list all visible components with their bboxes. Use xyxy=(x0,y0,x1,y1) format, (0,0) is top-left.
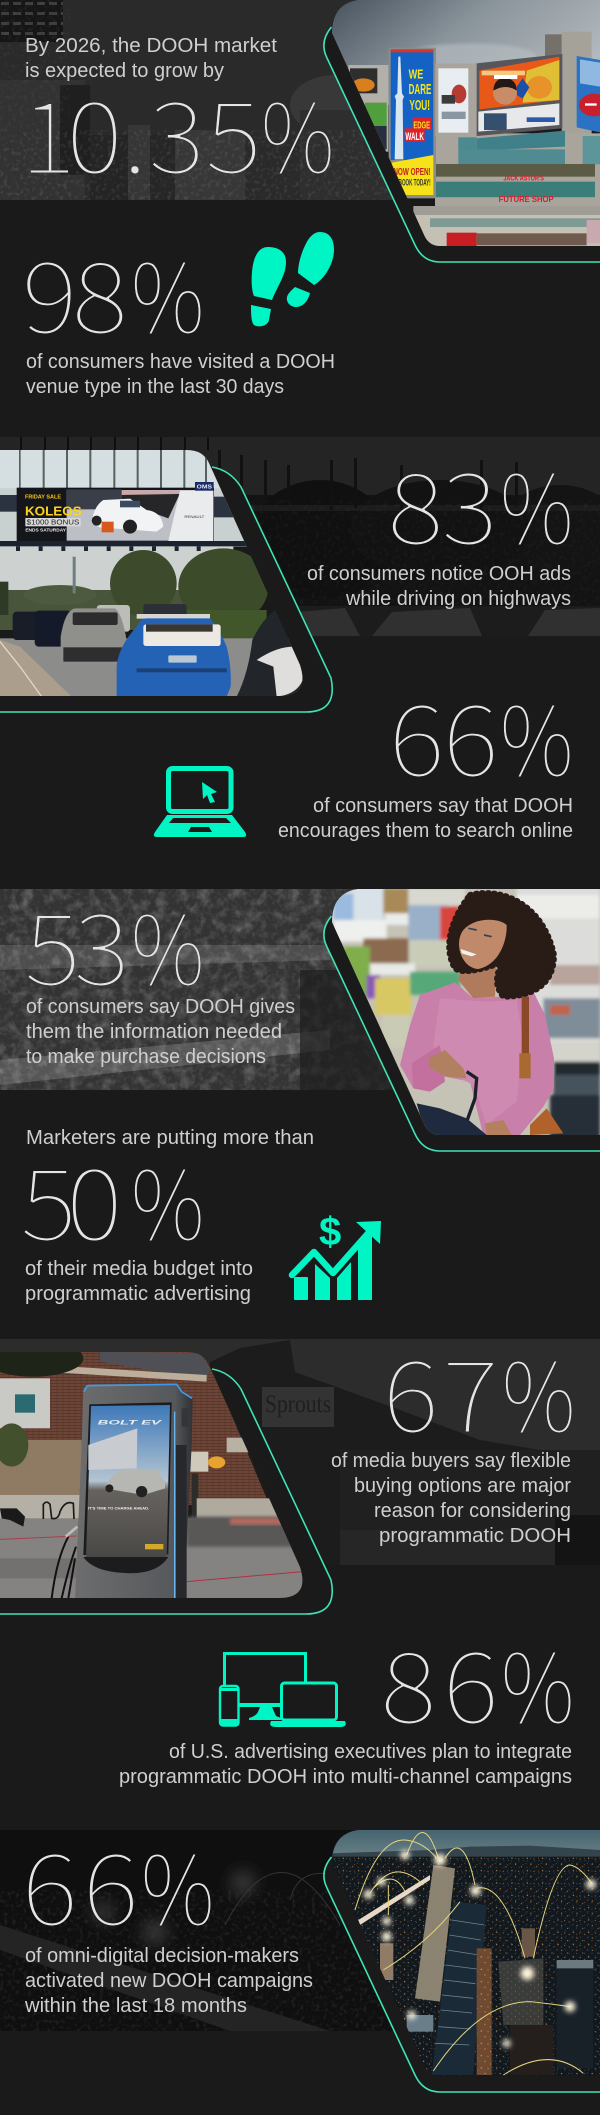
mid building xyxy=(436,133,600,198)
photo: highway billboard: FRIDAY SALE xyxy=(25,495,61,501)
photo frame outline xyxy=(0,450,332,712)
photo frame outline xyxy=(324,889,600,1151)
photo: Yonge-Dundas billboards: EDGE xyxy=(413,120,430,131)
text: omni-digital: activated new DOOH campaigns xyxy=(25,1970,313,1992)
background photo band: city at night xyxy=(0,1830,420,2031)
text: purchase decisions: to make purchase decisions xyxy=(26,1046,266,1068)
panel: online search xyxy=(154,666,574,842)
statistic: 83% xyxy=(388,434,574,573)
tree line xyxy=(0,590,188,630)
text: flexible buying xyxy=(331,1450,571,1547)
photo frame outline xyxy=(0,1352,332,1614)
text: venue visits xyxy=(26,351,335,398)
text: online search: encourages them to search online xyxy=(278,820,573,842)
background photo band: highway xyxy=(0,437,600,637)
text: multi-channel: of U.S. advertising executives plan to integrate xyxy=(169,1741,572,1763)
statistic: 86%: 86 xyxy=(380,1613,499,1751)
storefront signs: JACK ASTOR'S xyxy=(503,174,544,183)
background photo band: city square xyxy=(0,0,400,200)
network glow nodes xyxy=(364,1850,596,2047)
statistic: 10.35%: 10.35 xyxy=(20,63,261,201)
photo: Yonge-Dundas billboards xyxy=(330,0,600,250)
icon: laptop with cursor xyxy=(154,768,246,837)
photo: connected night skyline xyxy=(330,1825,600,2080)
background photo band: store shelves xyxy=(0,889,410,1090)
network arcs xyxy=(355,1832,592,2075)
statistic: 98%: % xyxy=(130,223,205,362)
photo: Yonge-Dundas billboards: FUTURE SHOP xyxy=(499,194,554,204)
text: multi-channel: programmatic DOOH into multi-channel campaigns xyxy=(119,1766,572,1788)
statistic: 66%: 66 xyxy=(388,666,498,804)
icon: growth chart with dollar sign: $ xyxy=(319,1210,341,1254)
photo: Yonge-Dundas billboards: WE xyxy=(409,66,423,81)
text: media budget: programmatic advertising xyxy=(25,1283,251,1305)
photo frame outline xyxy=(324,1830,600,2092)
kiosk body xyxy=(75,1384,193,1598)
text: omni-digital xyxy=(24,1945,313,2017)
sky lower xyxy=(0,546,234,590)
panel: market growth xyxy=(0,0,600,262)
text: flexible buying: of media buyers say flexible xyxy=(331,1450,571,1472)
panel: purchase decisions xyxy=(0,875,600,1151)
panel: multi-channel xyxy=(119,1613,575,1788)
right billboard xyxy=(577,56,600,132)
photo: Yonge-Dundas billboards: BOOK TODAY! xyxy=(399,178,431,188)
photo: Yonge-Dundas billboards: NOW OPEN! xyxy=(393,167,431,178)
statistic: 98% xyxy=(22,223,205,362)
text: media budget xyxy=(25,1258,253,1305)
photo: charging kiosk xyxy=(0,1340,310,1598)
intro text: By 2026, the DOOH market xyxy=(25,35,277,57)
statistic: 10.35%: % xyxy=(260,63,335,202)
statistic: 66%: 66 xyxy=(22,1815,139,1953)
strap, hand, basket, bag xyxy=(522,997,529,1053)
icon: growth chart with dollar sign xyxy=(292,1210,381,1300)
background photo band: storefront: Sprouts xyxy=(265,1391,331,1418)
statistic: 98%: 98 xyxy=(22,223,128,361)
statistic: 83%: % xyxy=(500,434,574,573)
photo: highway billboard xyxy=(0,440,310,700)
photo: highway billboard: ENDS SATURDAY xyxy=(25,528,66,533)
icon: footprints xyxy=(251,232,334,326)
text: venue visits: of consumers have visited a DOOH xyxy=(26,351,335,373)
statistic: 67%: 67 xyxy=(382,1322,499,1460)
photo: highway billboard: $1000 BONUS xyxy=(27,520,80,527)
road xyxy=(0,638,310,700)
photo: highway billboard: RENAULT xyxy=(184,515,205,519)
background photo band: storefront xyxy=(0,1339,600,1565)
text: flexible buying: reason for considering xyxy=(374,1500,571,1522)
text: online search xyxy=(278,795,573,842)
statistic: 53% xyxy=(24,875,205,1014)
photo: shopper in store xyxy=(330,885,600,1138)
text: purchase decisions: them the information needed xyxy=(26,1021,282,1043)
panel: media budget xyxy=(20,1127,381,1305)
photo: highway billboard: KOLEOS xyxy=(25,503,82,518)
photo: highway billboard: OMS xyxy=(197,485,212,491)
text: venue visits: venue type in the last 30 days xyxy=(26,376,284,398)
text: media budget: of their media budget into xyxy=(25,1258,253,1280)
text: flexible buying: programmatic DOOH xyxy=(379,1525,571,1547)
photo: Yonge-Dundas billboards: DARE xyxy=(409,82,431,98)
shelves xyxy=(330,885,465,1048)
statistic: 50%: % xyxy=(130,1130,205,1269)
text: flexible buying: buying options are major xyxy=(354,1475,571,1497)
billboard xyxy=(17,488,214,542)
panel: venue visits xyxy=(22,223,335,398)
text: omni-digital: within the last 18 months xyxy=(24,1995,247,2017)
statistic: 66% xyxy=(388,666,574,805)
intro text: is expected to grow by xyxy=(25,60,224,82)
woman: neck, hair, face xyxy=(458,966,497,998)
statistic: 86%: % xyxy=(500,1613,575,1752)
panel: flexible buying xyxy=(0,1322,600,1614)
white billboard xyxy=(435,63,477,136)
text: online search: of consumers say that DOOH xyxy=(313,795,573,817)
text: highway notice: while driving on highways xyxy=(345,588,571,610)
panel: highway notice xyxy=(0,434,600,712)
text: purchase decisions: of consumers say DOOH gives xyxy=(26,996,295,1018)
text: omni-digital: of omni-digital decision-makers xyxy=(25,1945,299,1967)
statistic: 50% xyxy=(20,1130,205,1269)
photo frame outline xyxy=(324,0,600,262)
photo: Yonge-Dundas billboards: WALK xyxy=(405,131,424,143)
text: purchase decisions xyxy=(26,996,295,1068)
statistic: 67%: % xyxy=(502,1322,576,1461)
statistic: 66%: % xyxy=(140,1815,215,1954)
statistic: 53%: 53 xyxy=(24,875,130,1013)
cars xyxy=(12,612,36,640)
statistic: 67% xyxy=(382,1322,576,1461)
photo: Yonge-Dundas billboards: YOU! xyxy=(409,98,430,114)
icon: phone, monitor and laptop xyxy=(220,1654,346,1727)
statistic: 50%: 50 xyxy=(20,1130,122,1268)
statistic: 86% xyxy=(380,1613,575,1752)
tall billboard xyxy=(389,48,436,198)
lead-in text: Marketers are putting more than xyxy=(26,1127,314,1149)
intro text xyxy=(25,35,277,82)
woman: body xyxy=(400,982,554,1135)
big billboard xyxy=(477,54,562,136)
statistic: 83%: 83 xyxy=(388,434,497,572)
text: highway notice: of consumers notice OOH ads xyxy=(307,563,571,585)
panel: omni-digital xyxy=(0,1815,600,2092)
photo: charging kiosk: BOLT EV xyxy=(98,1419,163,1426)
statistic: 66%: % xyxy=(500,666,574,805)
text: highway notice xyxy=(307,563,571,610)
statistic: 53%: % xyxy=(130,875,205,1014)
text: multi-channel xyxy=(119,1741,572,1788)
statistic: 66% xyxy=(22,1815,215,1954)
photo: charging kiosk: IT'S TIME TO CHARGE AHEAD. xyxy=(88,1507,149,1511)
right mirror car xyxy=(237,610,302,696)
